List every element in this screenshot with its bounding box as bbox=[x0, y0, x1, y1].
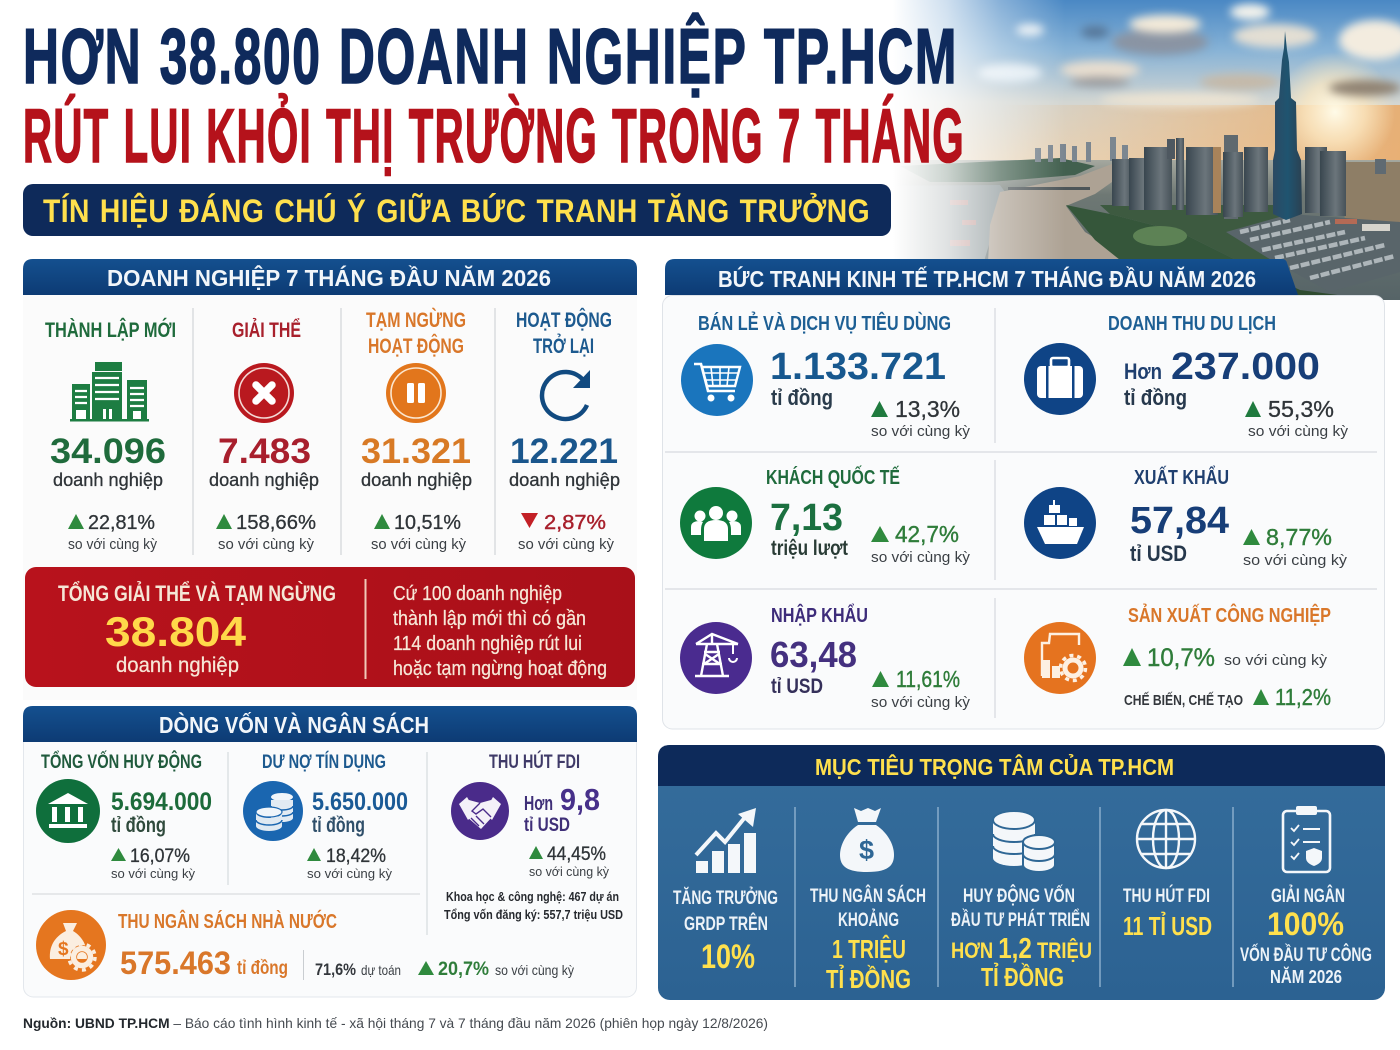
block: sản xuất công nghiệp bbox=[1024, 603, 1331, 710]
heading: dòng vốn bbox=[23, 706, 637, 742]
icon: money bag and gear bbox=[36, 910, 106, 980]
column: thành lập mới: so với cùng kỳ bbox=[68, 537, 158, 553]
block: thu hút FDI: Khoa học & công nghệ: 467 dự án bbox=[446, 890, 619, 904]
block: doanh thu du lịch: tỉ đồng bbox=[1124, 385, 1187, 410]
target: thu ngân sách: KHOẢNG bbox=[838, 909, 899, 931]
block: dư nợ tín dụng: DƯ NỢ TÍN DỤNG bbox=[262, 751, 386, 773]
icon: buildings bbox=[70, 362, 149, 422]
block: thu ngân sách nhà nước: dự toán bbox=[361, 962, 401, 978]
column: hoạt động trở lại: HOẠT ĐỘNG bbox=[516, 308, 612, 332]
icon: suitcase bbox=[1024, 343, 1096, 415]
target: thu hút FDI bbox=[1123, 810, 1212, 941]
block: doanh thu du lịch: DOANH THU DU LỊCH bbox=[1108, 313, 1276, 335]
panel: dòng vốn và ngân sách bbox=[23, 706, 637, 997]
icon: crane bbox=[680, 622, 752, 694]
target: giải ngân bbox=[1240, 806, 1372, 987]
heading: doanh nghiệp: DOANH NGHIỆP 7 THÁNG ĐẦU NĂM 2026 bbox=[107, 264, 551, 291]
block: tổng vốn huy động bbox=[36, 751, 212, 881]
subtitle banner bbox=[23, 184, 891, 236]
target: thu ngân sách: TỈ ĐỒNG bbox=[826, 964, 911, 994]
target: thu ngân sách: THU NGÂN SÁCH bbox=[810, 885, 926, 907]
block: thu ngân sách nhà nước bbox=[36, 909, 574, 981]
block: thu ngân sách nhà nước: 20,7% bbox=[438, 959, 489, 980]
target: giải ngân: NĂM 2026 bbox=[1270, 966, 1342, 987]
block: nhập khẩu: 63,48 bbox=[770, 634, 857, 675]
title bbox=[23, 12, 965, 179]
block: nhập khẩu: NHẬP KHẨU bbox=[771, 603, 868, 627]
icon: globe bbox=[1137, 810, 1195, 868]
target: thu ngân sách bbox=[810, 808, 926, 994]
icon: people bbox=[680, 487, 752, 559]
target: GRDP: TĂNG TRƯỞNG bbox=[673, 887, 778, 909]
block: bán lẻ: tỉ đồng bbox=[771, 385, 833, 410]
block: xuất khẩu: 8,77% bbox=[1266, 524, 1332, 550]
icon: factory and gear bbox=[1024, 622, 1096, 694]
target: thu ngân sách: 1 TRIỆU bbox=[832, 934, 906, 964]
block: khách quốc tế: 7,13 bbox=[770, 497, 843, 539]
callout: tổng giải thể và tạm ngừng: Cứ 100 doanh nghiệp bbox=[393, 583, 562, 605]
column: thành lập mới: 34.096 bbox=[50, 432, 166, 471]
target: huy động vốn: ĐẦU TƯ PHÁT TRIỂN bbox=[951, 909, 1090, 931]
target: giải ngân: 100% bbox=[1267, 906, 1344, 942]
icon: cargo ship bbox=[1024, 487, 1096, 559]
callout: tổng giải thể và tạm ngừng: 38.804 bbox=[105, 608, 247, 655]
column: hoạt động trở lại: 2,87% bbox=[544, 512, 606, 534]
icon: bank bbox=[36, 779, 100, 843]
target: huy động vốn: HUY ĐỘNG VỐN bbox=[963, 885, 1075, 907]
block: xuất khẩu: 57,84 bbox=[1130, 500, 1229, 542]
icon: coin stacks bbox=[993, 811, 1055, 872]
target: GRDP: GRDP TRÊN bbox=[684, 913, 768, 935]
target: giải ngân: GIẢI NGÂN bbox=[1271, 885, 1345, 907]
block: xuất khẩu: tỉ USD bbox=[1130, 541, 1187, 566]
column: tạm ngừng hoạt động: 31.321 bbox=[361, 432, 471, 471]
block: thu ngân sách nhà nước: tỉ đồng bbox=[237, 958, 288, 979]
block: xuất khẩu bbox=[1024, 466, 1348, 569]
column: tạm ngừng hoạt động bbox=[361, 308, 472, 553]
block: doanh thu du lịch: 237.000 bbox=[1171, 346, 1320, 388]
column: giải thể: 158,66% bbox=[236, 512, 316, 534]
column: thành lập mới bbox=[45, 318, 176, 553]
block: tổng vốn huy động: so với cùng kỳ bbox=[111, 866, 195, 881]
block: doanh thu du lịch bbox=[1024, 313, 1349, 440]
block: thu hút FDI bbox=[444, 751, 623, 922]
block: sản xuất công nghiệp: CHẾ BIẾN, CHẾ TẠO bbox=[1124, 692, 1243, 709]
column: thành lập mới: THÀNH LẬP MỚI bbox=[45, 318, 176, 342]
block: thu hút FDI: Tổng vốn đăng ký: 557,7 triệu USD bbox=[444, 908, 623, 922]
block: tổng vốn huy động: 16,07% bbox=[130, 846, 190, 867]
target: thu hút FDI: 11 TỈ USD bbox=[1123, 911, 1212, 941]
block: dư nợ tín dụng: 18,42% bbox=[326, 846, 386, 867]
subtitle banner: TÍN HIỆU ĐÁNG CHÚ Ý GIỮA BỨC TRANH TĂNG TRƯỞNG bbox=[43, 193, 870, 229]
column: giải thể: 7.483 bbox=[218, 432, 311, 471]
block: xuất khẩu: so với cùng kỳ bbox=[1243, 552, 1348, 569]
target: GRDP bbox=[673, 808, 778, 976]
column: tạm ngừng hoạt động: 10,51% bbox=[394, 512, 461, 534]
column: tạm ngừng hoạt động: HOẠT ĐỘNG bbox=[368, 334, 464, 358]
heading: mục tiêu: MỤC TIÊU TRỌNG TÂM CỦA TP.HCM bbox=[815, 752, 1174, 780]
block: sản xuất công nghiệp: SẢN XUẤT CÔNG NGHIỆP bbox=[1128, 603, 1331, 627]
source note: Nguồn: UBND TP.HCM – Báo cáo tình hình kinh tế - xã hội tháng 7 và 7 tháng đầu năm 2026 (phiên họp ngày 12/8/2026) bbox=[23, 1015, 768, 1031]
block: doanh thu du lịch: 55,3% bbox=[1268, 396, 1334, 422]
panel: bức tranh kinh tế bbox=[662, 259, 1384, 729]
callout: tổng giải thể và tạm ngừng: 114 doanh nghiệp rút lui bbox=[393, 633, 582, 655]
block: doanh thu du lịch: so với cùng kỳ bbox=[1248, 423, 1349, 440]
block: sản xuất công nghiệp: so với cùng kỳ bbox=[1224, 652, 1328, 669]
icon: money bag bbox=[840, 808, 894, 872]
icon: coins bbox=[243, 781, 303, 841]
icon: dissolve bbox=[234, 363, 294, 423]
block: thu hút FDI: 9,8 bbox=[560, 782, 600, 817]
icon: refresh bbox=[542, 370, 590, 419]
photo: Ho Chi Minh City skyline bbox=[860, 0, 1400, 300]
icon: growth chart bbox=[696, 808, 756, 873]
column: tạm ngừng hoạt động: doanh nghiệp bbox=[361, 470, 472, 490]
block: sản xuất công nghiệp: 11,2% bbox=[1275, 684, 1331, 710]
icon: clipboard bbox=[1283, 806, 1330, 872]
block: thu hút FDI: THU HÚT FDI bbox=[489, 751, 580, 773]
block: thu hút FDI: so với cùng kỳ bbox=[529, 864, 609, 879]
callout: tổng giải thể và tạm ngừng: doanh nghiệp bbox=[116, 654, 239, 677]
column: giải thể: GIẢI THỂ bbox=[232, 319, 301, 342]
block: dư nợ tín dụng bbox=[243, 751, 408, 881]
target: huy động vốn: HƠN 1,2 TRIỆU bbox=[951, 933, 1092, 965]
block: nhập khẩu bbox=[680, 603, 971, 711]
target: huy động vốn bbox=[951, 811, 1092, 992]
block: khách quốc tế: triệu lượt bbox=[771, 537, 848, 560]
block: thu ngân sách nhà nước: THU NGÂN SÁCH NHÀ NƯỚC bbox=[118, 909, 337, 933]
column: giải thể: so với cùng kỳ bbox=[218, 537, 315, 553]
icon: pause bbox=[386, 363, 446, 423]
column: thành lập mới: 22,81% bbox=[88, 512, 155, 534]
target: thu hút FDI: THU HÚT FDI bbox=[1123, 885, 1210, 907]
column: thành lập mới: doanh nghiệp bbox=[53, 470, 163, 490]
callout: tổng giải thể và tạm ngừng: TỔNG GIẢI THỂ VÀ TẠM NGỪNG bbox=[58, 581, 336, 606]
block: tổng vốn huy động: tỉ đồng bbox=[111, 814, 166, 837]
column: tạm ngừng hoạt động: TẠM NGỪNG bbox=[366, 308, 466, 332]
block: bán lẻ bbox=[681, 311, 971, 440]
block: tổng vốn huy động: TỔNG VỐN HUY ĐỘNG bbox=[41, 751, 202, 773]
target: huy động vốn: TỈ ĐỒNG bbox=[981, 962, 1064, 992]
heading: bức tranh kinh tế: BỨC TRANH KINH TẾ TP.HCM 7 THÁNG ĐẦU NĂM 2026 bbox=[718, 265, 1256, 292]
block: bán lẻ: 13,3% bbox=[895, 396, 960, 422]
block: thu hút FDI: tỉ USD bbox=[524, 815, 570, 836]
column: giải thể bbox=[209, 319, 319, 553]
icon: money bag and gear: $ bbox=[58, 939, 69, 960]
callout: tổng giải thể và tạm ngừng bbox=[25, 567, 635, 687]
block: khách quốc tế: 42,7% bbox=[895, 521, 959, 547]
block: thu ngân sách nhà nước: so với cùng kỳ bbox=[495, 962, 574, 978]
block: dư nợ tín dụng: tỉ đồng bbox=[312, 814, 365, 837]
column: giải thể: doanh nghiệp bbox=[209, 470, 319, 490]
block: bán lẻ: so với cùng kỳ bbox=[871, 423, 971, 440]
column: hoạt động trở lại: TRỞ LẠI bbox=[533, 334, 594, 358]
icon: handshake bbox=[451, 782, 509, 840]
block: thu ngân sách nhà nước: 71,6% bbox=[315, 960, 356, 979]
block: bán lẻ: 1.133.721 bbox=[770, 346, 946, 388]
block: nhập khẩu: so với cùng kỳ bbox=[871, 694, 971, 711]
callout: tổng giải thể và tạm ngừng: thành lập mới thì có gần bbox=[393, 608, 586, 630]
block: khách quốc tế: KHÁCH QUỐC TẾ bbox=[766, 465, 900, 489]
panel: mục tiêu trọng tâm bbox=[658, 745, 1385, 1000]
callout: tổng giải thể và tạm ngừng: hoặc tạm ngừng hoạt động bbox=[393, 658, 607, 680]
block: thu ngân sách nhà nước: 575.463 bbox=[120, 945, 231, 981]
block: tổng vốn huy động: 5.694.000 bbox=[111, 788, 212, 816]
icon: cart bbox=[681, 344, 753, 416]
block: doanh thu du lịch: Hơn bbox=[1124, 359, 1162, 384]
target: GRDP: 10% bbox=[701, 938, 755, 976]
block: bán lẻ: BÁN LẺ VÀ DỊCH VỤ TIÊU DÙNG bbox=[698, 311, 951, 335]
icon: money bag: $ bbox=[859, 835, 874, 865]
block: nhập khẩu: 11,61% bbox=[896, 666, 960, 692]
block: khách quốc tế: so với cùng kỳ bbox=[871, 549, 971, 566]
block: thu hút FDI: Hơn bbox=[524, 793, 553, 815]
heading: doanh nghiệp bbox=[23, 259, 637, 295]
heading: mục tiêu bbox=[658, 745, 1385, 786]
column: hoạt động trở lại: 12.221 bbox=[510, 432, 618, 471]
block: xuất khẩu: XUẤT KHẨU bbox=[1134, 466, 1229, 489]
block: thu hút FDI: 44,45% bbox=[547, 844, 606, 865]
heading: bức tranh kinh tế bbox=[665, 259, 1298, 295]
block: dư nợ tín dụng: 5.650.000 bbox=[312, 788, 408, 816]
column: hoạt động trở lại bbox=[509, 308, 620, 553]
block: dư nợ tín dụng: so với cùng kỳ bbox=[307, 866, 393, 881]
column: hoạt động trở lại: doanh nghiệp bbox=[509, 470, 620, 490]
block: sản xuất công nghiệp: 10,7% bbox=[1147, 644, 1215, 672]
heading: dòng vốn: DÒNG VỐN VÀ NGÂN SÁCH bbox=[159, 711, 429, 738]
block: khách quốc tế bbox=[680, 465, 971, 566]
column: hoạt động trở lại: so với cùng kỳ bbox=[518, 537, 615, 553]
column: tạm ngừng hoạt động: so với cùng kỳ bbox=[371, 537, 467, 553]
block: nhập khẩu: tỉ USD bbox=[771, 675, 823, 698]
panel: doanh nghiệp 7 tháng bbox=[23, 259, 637, 700]
